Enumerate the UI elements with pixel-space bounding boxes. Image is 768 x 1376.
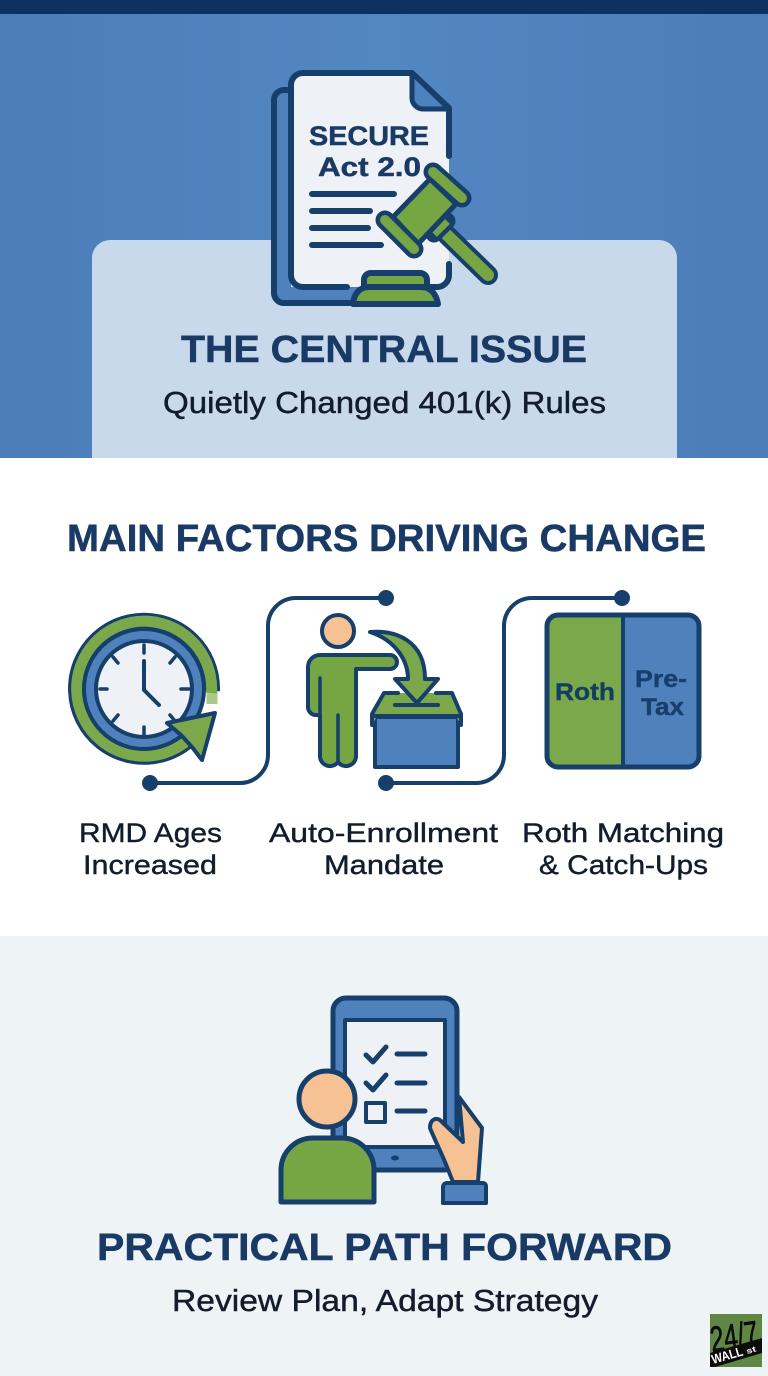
panel: main factors section [0, 458, 768, 936]
document title [309, 121, 429, 182]
label: Pre-Tax: Tax [641, 694, 685, 721]
person [281, 1071, 374, 1202]
icon: SECURE Act document with gavel [274, 73, 488, 304]
label: RMD ages increased [79, 818, 222, 880]
heading: practical path forward: PRACTICAL PATH FORWARD [97, 1227, 672, 1269]
document title: Act 2.0 [318, 152, 421, 182]
document title: SECURE [309, 121, 429, 151]
label: Roth: Roth [555, 679, 615, 706]
logo: 24/7 Wall St: st [745, 1344, 758, 1356]
label: auto-enrollment mandate: Mandate [324, 850, 444, 880]
checklist [366, 1047, 425, 1122]
gavel [385, 172, 488, 275]
ballot box [372, 693, 461, 767]
icon: person with auto-enrollment box [308, 615, 461, 767]
label: RMD ages increased: Increased [83, 850, 217, 880]
label: Pre-Tax: Pre- [635, 666, 687, 693]
heading: main factors: MAIN FACTORS DRIVING CHANGE [67, 518, 706, 560]
curved arrow into box [370, 632, 438, 703]
label: RMD ages increased: RMD Ages [79, 818, 222, 848]
label: auto-enrollment mandate: Auto-Enrollment [269, 818, 499, 848]
gavel sound block [353, 273, 438, 304]
hand and cuff [430, 1097, 486, 1203]
panel: central issue section [0, 0, 768, 458]
subheading: central issue: Quietly Changed 401(k) Rules [163, 385, 606, 420]
person [308, 615, 397, 766]
label: Roth matching and catch-ups [522, 818, 724, 880]
connector lines [142, 590, 630, 791]
icon: clock with circular arrow [77, 621, 215, 760]
label: Roth matching and catch-ups: & Catch-Ups [539, 850, 708, 880]
central issue card [92, 240, 677, 458]
ballot slot [395, 703, 438, 707]
logo: 24/7 Wall St: WALL [710, 1344, 745, 1367]
icon: Roth and Pre-Tax split card [547, 615, 699, 767]
icon: person reviewing checklist on tablet [281, 998, 486, 1203]
panel: practical path section [0, 936, 768, 1376]
label: Roth matching and catch-ups: Roth Matching [522, 818, 724, 848]
label: auto-enrollment mandate [269, 818, 499, 880]
heading: the central issue: THE CENTRAL ISSUE [181, 329, 587, 371]
top bar [0, 0, 768, 14]
subheading: review plan: Review Plan, Adapt Strategy [172, 1283, 599, 1318]
label: Pre-Tax [635, 666, 687, 721]
